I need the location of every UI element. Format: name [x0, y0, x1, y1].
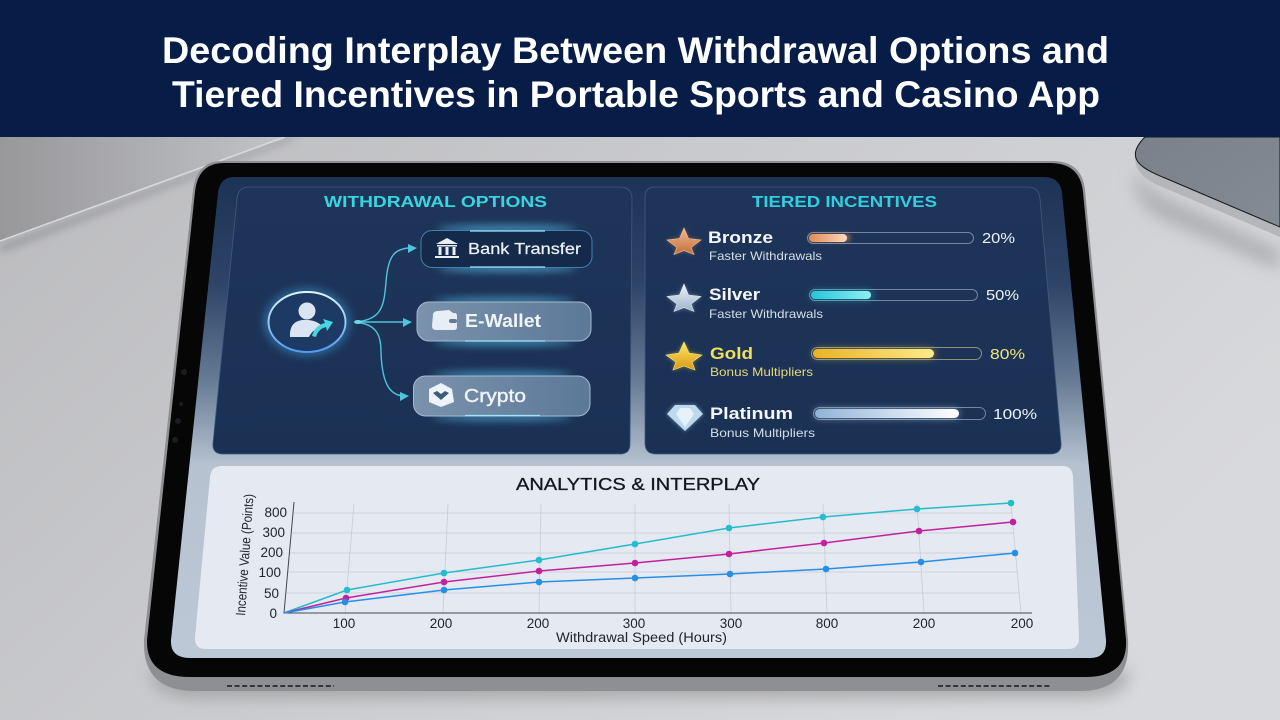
x axis tick labels: 200: [527, 616, 549, 631]
tablet device, top right: [1134, 137, 1280, 270]
tier: gold: Gold: [710, 344, 753, 363]
x axis tick labels: [333, 616, 1033, 631]
tier: platinum: [667, 404, 1037, 440]
series: blue: [284, 550, 1018, 613]
option: e-wallet: [417, 297, 591, 346]
icon: bank: [435, 238, 459, 258]
series: teal: [284, 500, 1014, 613]
line chart: [233, 493, 1033, 645]
tier: gold: Bonus Multipliers: [710, 365, 813, 379]
x axis tick labels: 200: [430, 616, 452, 631]
x axis title: Withdrawal Speed (Hours): [556, 630, 727, 645]
header banner: [0, 0, 1280, 137]
panel: withdrawal options: [213, 187, 632, 454]
tier: gold: [666, 342, 1025, 379]
connector arrows: [354, 244, 417, 401]
y axis title: Incentive Value (Points): [233, 493, 257, 616]
title: Decoding Interplay Between Withdrawal Options and: [162, 30, 1109, 71]
tier: silver: Faster Withdrawals: [709, 307, 823, 321]
option: e-wallet: E-Wallet: [465, 311, 541, 331]
tier: platinum: Bonus Multipliers: [710, 426, 815, 440]
tablet screen: [171, 177, 1106, 658]
y axis tick labels: 300: [262, 525, 285, 540]
x axis tick labels: 300: [720, 616, 742, 631]
tier: bronze: [667, 228, 1015, 263]
y axis tick labels: 50: [264, 586, 279, 601]
main tablet: [144, 161, 1130, 698]
panel: analytics and interplay: [195, 466, 1079, 649]
user avatar node: [263, 287, 351, 357]
icon: wallet: [432, 310, 457, 330]
x axis tick labels: 200: [1011, 616, 1033, 631]
y axis tick labels: [258, 505, 287, 621]
chart grid: [286, 504, 1021, 613]
laptop corner, top left: [0, 137, 300, 254]
tier: gold: 80%: [990, 346, 1025, 363]
tablet silver rim: [144, 161, 1128, 691]
heading: analytics: ANALYTICS & INTERPLAY: [516, 474, 760, 494]
tier: silver: 50%: [986, 287, 1019, 304]
tier: bronze: Faster Withdrawals: [709, 249, 822, 263]
tier: platinum: Platinum: [710, 404, 793, 423]
speaker grille left: [227, 685, 334, 687]
tablet shadow: [150, 670, 1130, 698]
option: bank transfer: Bank Transfer: [468, 241, 581, 258]
tier: bronze: Bronze: [708, 228, 773, 247]
tier: silver: [667, 284, 1019, 321]
option: bank transfer: [421, 225, 592, 272]
y axis tick labels: 100: [258, 565, 281, 580]
series: magenta: [284, 519, 1016, 613]
x axis tick labels: 800: [816, 616, 838, 631]
speaker grille right: [938, 685, 1052, 687]
y axis tick labels: 200: [260, 545, 283, 560]
chart axes: [284, 502, 1032, 613]
tier: silver: Silver: [709, 285, 760, 304]
heading: tiered incentives: TIERED INCENTIVES: [752, 194, 937, 211]
heading: withdrawal options: WITHDRAWAL OPTIONS: [324, 194, 547, 211]
x axis tick labels: 200: [913, 616, 935, 631]
x axis tick labels: 100: [333, 616, 355, 631]
tier: platinum: 100%: [993, 406, 1037, 423]
tier: bronze: 20%: [982, 230, 1015, 247]
option: crypto: Crypto: [464, 386, 526, 406]
y axis tick labels: 0: [269, 606, 277, 621]
tablet black bezel: [147, 163, 1126, 677]
y axis tick labels: 800: [264, 505, 287, 520]
icon: crypto: [429, 383, 454, 407]
option: crypto: [414, 371, 590, 421]
side sensors: [172, 369, 187, 443]
x axis tick labels: 300: [623, 616, 645, 631]
title: Tiered Incentives in Portable Sports and Casino App: [172, 74, 1100, 115]
panel: tiered incentives: [645, 187, 1061, 454]
